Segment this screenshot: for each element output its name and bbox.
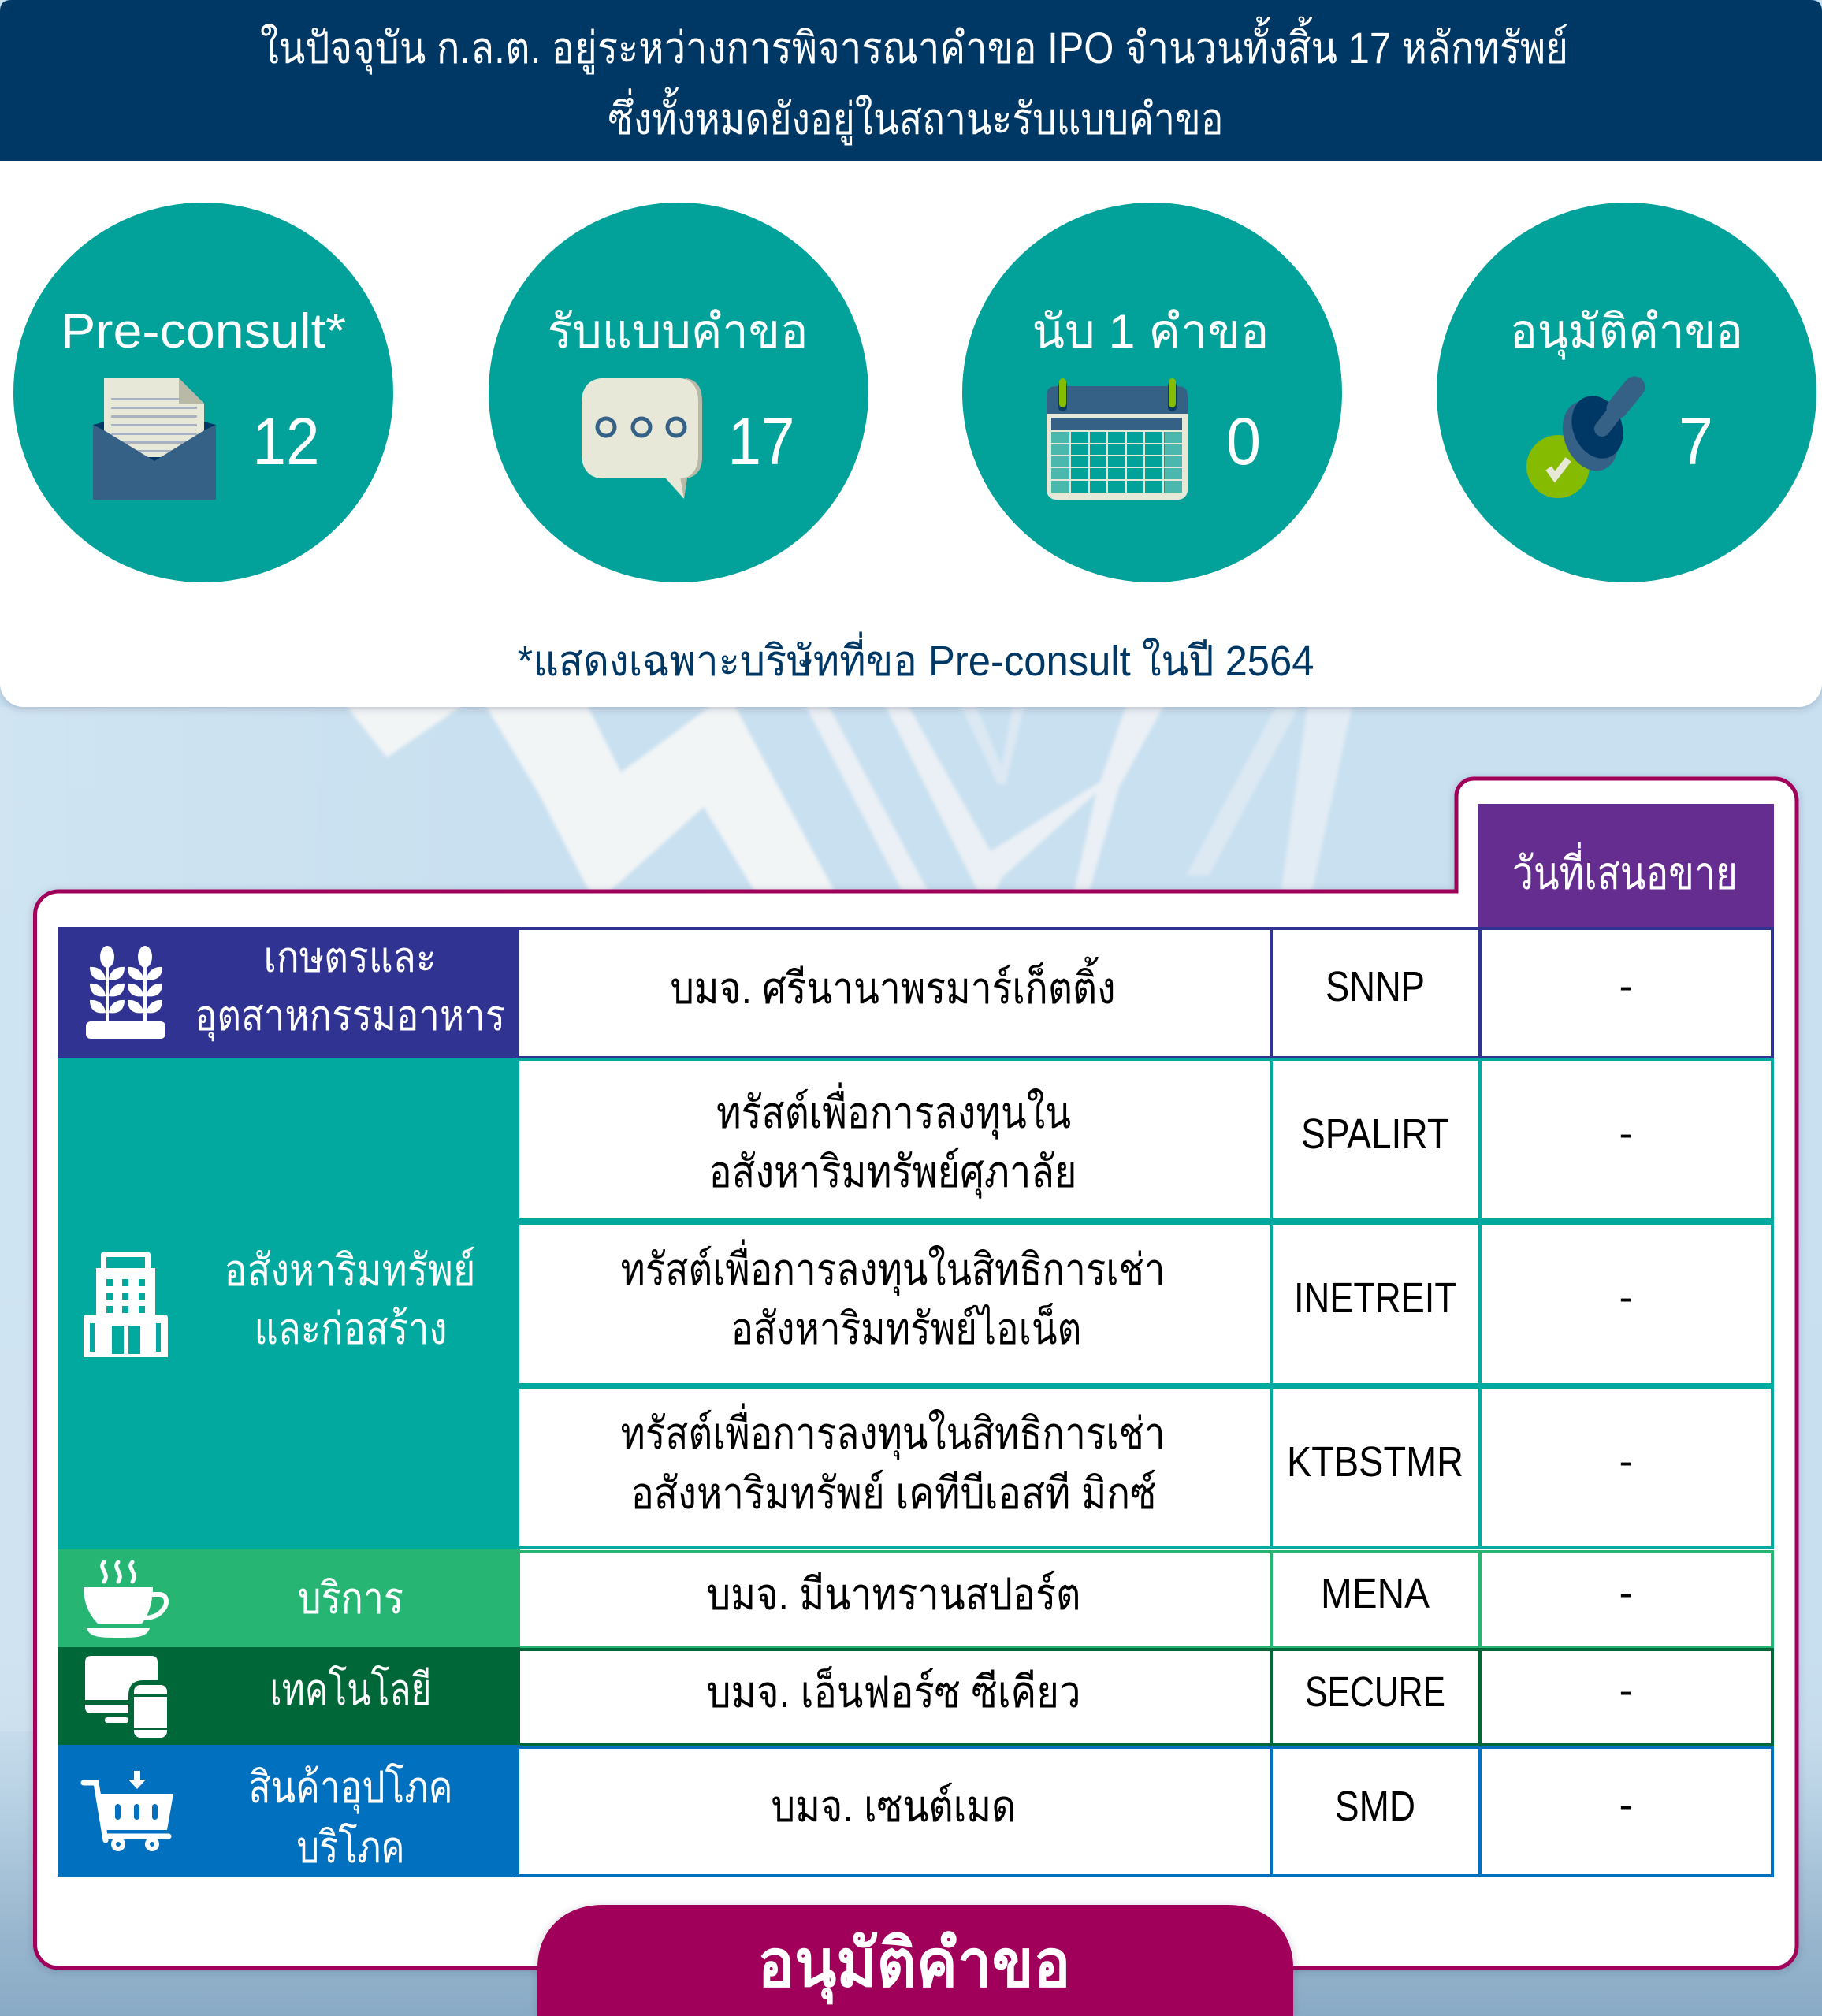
- icon: envelope: [93, 378, 216, 500]
- column header: offering date: [1478, 804, 1774, 928]
- table row: SPALIRT: [518, 1059, 1772, 1220]
- table row: SPALIRT: -: [1619, 1111, 1632, 1155]
- icon: shopping cart: [84, 1771, 173, 1851]
- row: agriculture and food: [58, 927, 1772, 1058]
- table row: INETREIT: INETREIT: [1294, 1274, 1456, 1322]
- header banner: ในปัจจุบัน ก.ล.ต. อยู่ระหว่างการพิจารณาคำขอ IPO จำนวนทั้งสิ้น 17 หลักทรัพย์: [260, 17, 1568, 75]
- approved button: อนุมัติคำขอ: [758, 1926, 1070, 2005]
- stat circle: Pre-consult: Pre-consult*: [61, 304, 346, 359]
- stat circle: count 1 filing: 0: [1226, 404, 1261, 478]
- stat circle: count 1 filing: นับ 1 คำขอ: [1032, 305, 1269, 358]
- stat circle: Pre-consult: [13, 203, 393, 582]
- row: technology: [58, 1647, 1772, 1745]
- stat circle: approved: อนุมัติคำขอ: [1510, 305, 1743, 360]
- table row: INETREIT: [518, 1223, 1772, 1385]
- header banner: [0, 0, 1822, 161]
- table row: KTBSTMR: KTBSTMR: [1287, 1438, 1463, 1486]
- row group: real estate and construction: และก่อสร้าง: [254, 1304, 448, 1353]
- row: consumer products: บริโภค: [296, 1822, 405, 1872]
- row: technology: บมจ. เอ็นฟอร์ซ ซีเคียว: [706, 1665, 1081, 1717]
- footnote: *แสดงเฉพาะบริษัทที่ขอ Pre-consult ในปี 2564: [517, 631, 1314, 685]
- row: services: MENA: [1321, 1570, 1430, 1617]
- row: consumer products: สินค้าอุปโภค: [249, 1762, 452, 1814]
- row: agriculture and food: อุตสาหกรรมอาหาร: [195, 992, 505, 1042]
- column header: offering date: วันที่เสนอขาย: [1512, 842, 1738, 899]
- table row: INETREIT: อสังหาริมทรัพย์ไอเน็ต: [731, 1302, 1081, 1353]
- row: consumer products: บมจ. เซนต์เมด: [771, 1781, 1017, 1831]
- table row: INETREIT: -: [1619, 1275, 1632, 1319]
- table row: SPALIRT: อสังหาริมทรัพย์ศุภาลัย: [709, 1147, 1076, 1199]
- table row: SPALIRT: SPALIRT: [1301, 1110, 1449, 1158]
- row: consumer products: -: [1619, 1783, 1632, 1827]
- row: services: [58, 1549, 1772, 1647]
- table row: KTBSTMR: ทรัสต์เพื่อการลงทุนในสิทธิการเช่า: [621, 1403, 1165, 1460]
- top white panel: [0, 0, 1822, 707]
- row group: real estate and construction: อสังหาริมทรัพย์: [224, 1245, 476, 1295]
- icon: stamp: [1526, 387, 1634, 498]
- row: consumer products: SMD: [1335, 1783, 1415, 1830]
- stat circle: count 1 filing: [962, 203, 1342, 582]
- stat circle: Pre-consult: 12: [252, 404, 320, 478]
- stat circle: received filing: รับแบบคำขอ: [547, 305, 809, 358]
- table row: INETREIT: ทรัสต์เพื่อการลงทุนในสิทธิการเช่า: [621, 1239, 1165, 1296]
- row: agriculture and food: -: [1619, 964, 1632, 1008]
- icon: speech bubble: [582, 378, 702, 499]
- row: technology: เทคโนโลยี: [270, 1665, 432, 1714]
- row group: real estate and construction: [58, 1058, 1772, 1549]
- stat circle: received filing: [489, 203, 868, 582]
- row: technology: -: [1619, 1668, 1632, 1713]
- icon: building: [84, 1252, 168, 1357]
- table row: KTBSTMR: [518, 1387, 1772, 1548]
- icon: plants: [86, 946, 165, 1039]
- table frame: [35, 779, 1797, 1968]
- stat circle: approved: [1437, 203, 1816, 582]
- icon: calendar: [1047, 378, 1188, 500]
- table row: SPALIRT: ทรัสต์เพื่อการลงทุนใน: [716, 1082, 1071, 1140]
- header banner: ซึ่งทั้งหมดยังอยู่ในสถานะรับแบบคำขอ: [608, 87, 1223, 146]
- icon: coffee cup: [84, 1562, 166, 1638]
- row: technology: SECURE: [1305, 1668, 1445, 1716]
- stat circle: received filing: 17: [728, 404, 794, 478]
- row: agriculture and food: เกษตรและ: [263, 934, 437, 981]
- row: services: -: [1619, 1571, 1632, 1615]
- approved button: [537, 1905, 1293, 2016]
- row: services: บมจ. มีนาทรานสปอร์ต: [706, 1569, 1081, 1619]
- row: agriculture and food: SNNP: [1326, 963, 1425, 1010]
- row: agriculture and food: บมจ. ศรีนานาพรมาร์เก็ตติ้ง: [670, 957, 1116, 1013]
- icon: devices: [85, 1656, 167, 1738]
- stat circle: approved: 7: [1679, 404, 1713, 478]
- table row: KTBSTMR: -: [1619, 1439, 1632, 1483]
- table row: KTBSTMR: อสังหาริมทรัพย์ เคทีบีเอสที มิกซ์: [630, 1468, 1157, 1518]
- row: consumer products: [58, 1745, 1772, 1877]
- row: services: บริการ: [298, 1573, 403, 1623]
